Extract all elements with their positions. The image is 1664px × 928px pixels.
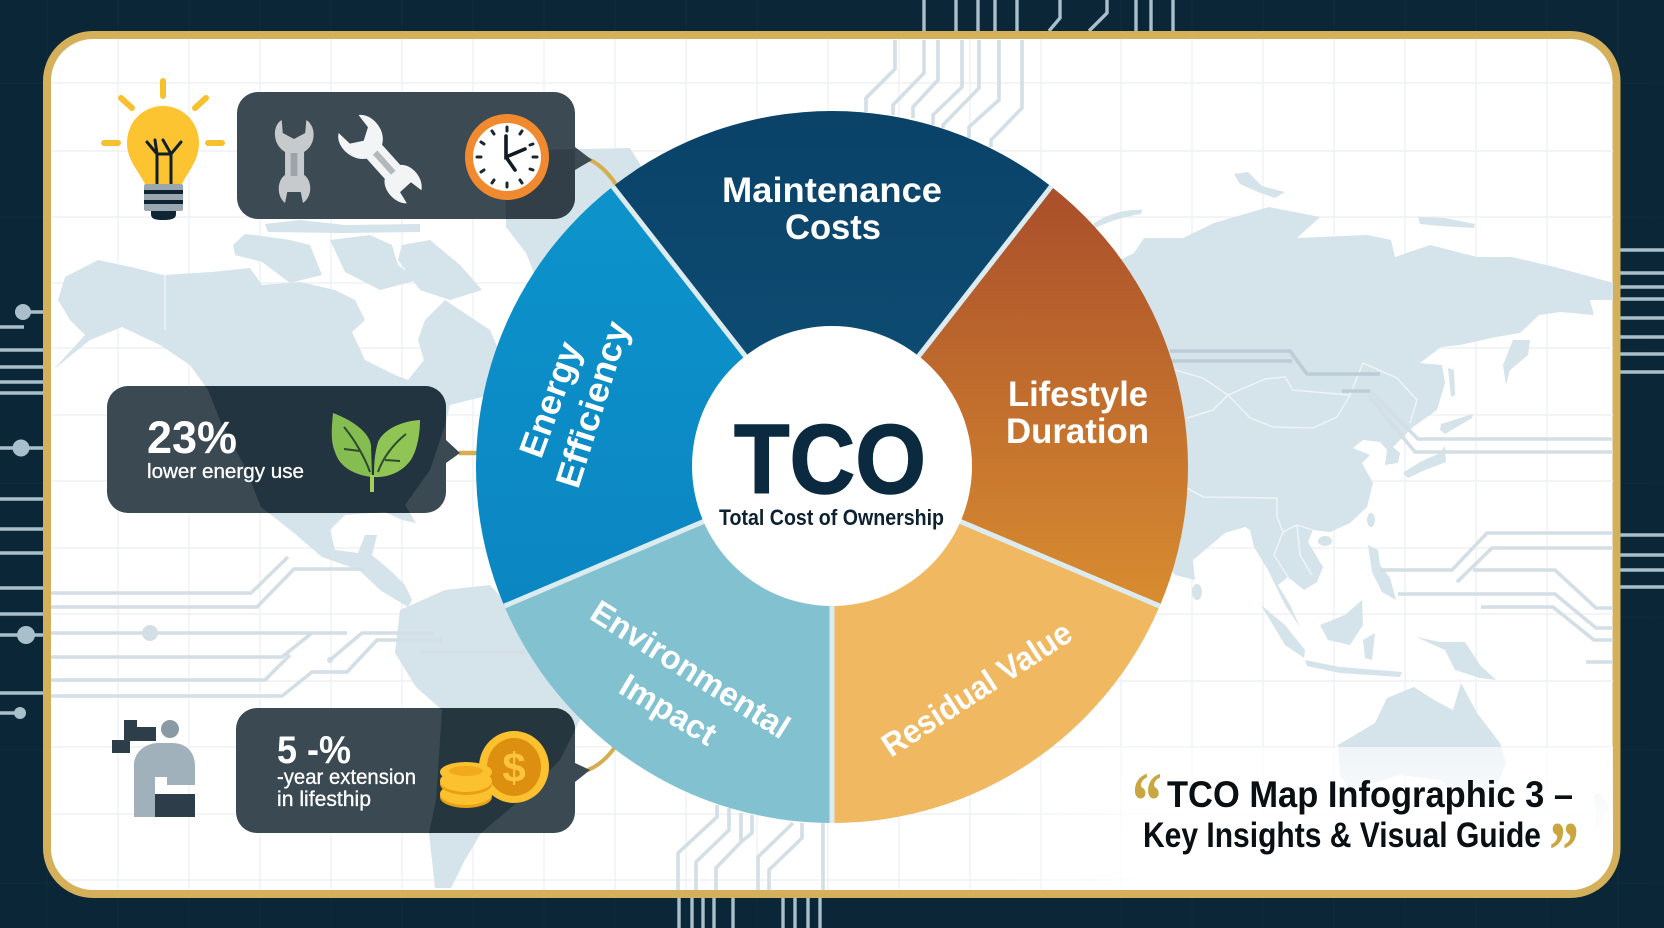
segment separators xyxy=(504,186,1160,823)
label: maintenance costs: Maintenance xyxy=(722,171,942,210)
label: maintenance costs: Costs xyxy=(785,208,881,247)
country borders xyxy=(165,275,1417,580)
icon: bottom-left figure xyxy=(112,720,195,817)
connector: maintenance callout xyxy=(588,159,624,197)
connector: lifespan callout xyxy=(588,747,615,770)
connector: energy callout xyxy=(459,451,478,455)
hub subtitle: Total Cost of Ownership xyxy=(719,505,944,530)
donut wheel xyxy=(476,111,1188,823)
label: environmental impact: Environmental xyxy=(584,593,797,746)
stat: 5 -%: 5 -% xyxy=(277,729,351,772)
segment: energy efficiency xyxy=(476,186,832,606)
callout body xyxy=(237,92,592,219)
world map xyxy=(53,148,1614,888)
icon: wrench xyxy=(333,110,430,211)
closing quote mark: ” xyxy=(1549,805,1579,896)
label: residual value: Residual Value xyxy=(875,614,1078,764)
opening quote mark: “ xyxy=(1132,755,1162,846)
label: energy efficiency: Energy xyxy=(512,336,590,463)
segment: residual value xyxy=(832,467,1160,823)
segment: lifestyle duration xyxy=(832,186,1188,606)
stat caption line 2: in lifesthip xyxy=(277,788,371,811)
callout: lifespan extension xyxy=(236,708,590,833)
title line 1: TCO Map Infographic 3 – xyxy=(1167,774,1573,815)
label: maintenance costs xyxy=(722,171,942,247)
title fade panel xyxy=(1080,747,1613,890)
callout body xyxy=(107,386,460,513)
label: energy efficiency: Efficiency xyxy=(548,316,638,492)
label: lifestyle duration xyxy=(1006,375,1149,451)
icon: light bulb xyxy=(104,81,222,220)
callout body xyxy=(236,708,590,833)
stat: 23%: 23% xyxy=(147,412,237,463)
segment: environmental impact xyxy=(504,467,832,823)
label: energy efficiency xyxy=(512,316,638,492)
callout: energy use xyxy=(107,386,460,513)
label: lifestyle duration: Duration xyxy=(1006,412,1149,451)
stat caption line 1: -year extension xyxy=(277,766,416,789)
callout: maintenance tools xyxy=(237,92,592,219)
label: lifestyle duration: Lifestyle xyxy=(1008,375,1148,414)
icon: clock xyxy=(465,114,549,200)
title block xyxy=(1132,755,1579,896)
icon: leaves xyxy=(332,413,420,492)
callout map shadow xyxy=(506,150,575,219)
segment: maintenance costs xyxy=(613,111,1051,467)
callout map shadow xyxy=(205,386,446,513)
icon: coins xyxy=(440,731,549,808)
label: environmental impact: Impact xyxy=(613,666,723,753)
title line 2: Key Insights & Visual Guide xyxy=(1143,816,1541,855)
icon: coins: $ xyxy=(502,744,526,791)
hub circle xyxy=(692,326,972,606)
stat caption: lower energy use xyxy=(147,461,304,483)
icon: spanner xyxy=(275,120,314,203)
callout map shadow xyxy=(429,708,575,833)
hub heading: TCO xyxy=(734,404,926,514)
